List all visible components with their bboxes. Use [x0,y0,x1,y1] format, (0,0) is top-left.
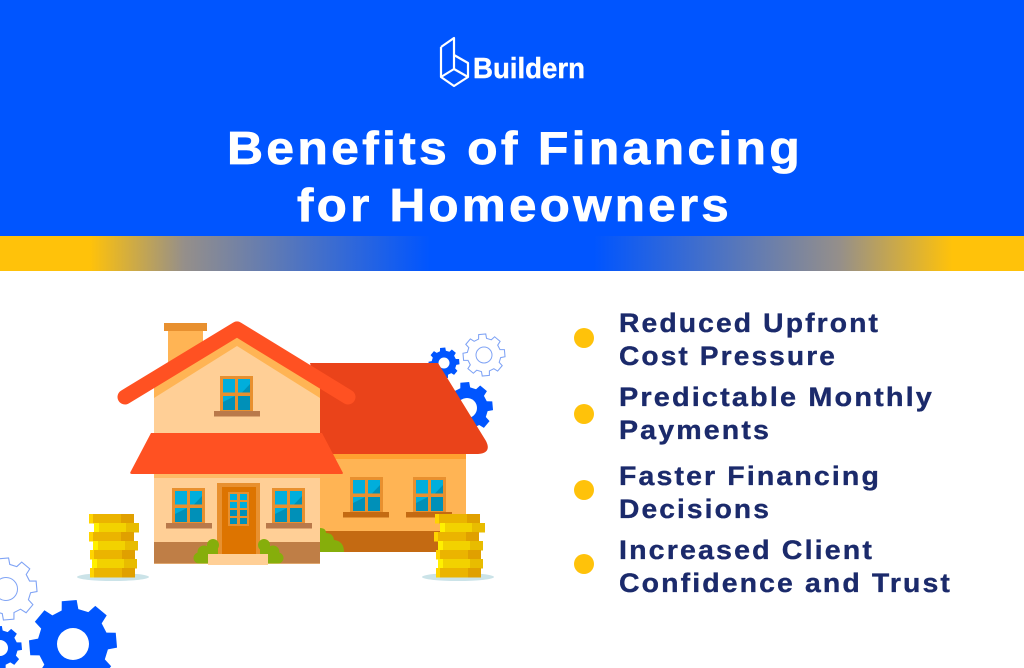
main roof [125,329,348,397]
benefit 4: Confidence and Trust [619,568,952,598]
gable wall [154,340,320,475]
porch roof [130,433,343,474]
outline gear [461,332,507,378]
header background [0,0,1024,237]
chimney [164,323,207,370]
large blue gear [26,597,120,668]
title [227,122,803,231]
small blue gear [427,346,461,380]
gears top right [427,332,507,436]
upper window [214,376,260,416]
right wing roof [310,363,488,454]
icon: building cube [441,38,468,86]
benefits list [574,308,952,598]
lower windows [166,488,312,528]
benefit 2: Predictable Monthly [619,382,934,412]
benefit 4: Increased Client [619,535,874,565]
benefit 1: Reduced Upfront [619,308,880,338]
benefit 3 [574,461,881,524]
lower wall [154,474,320,564]
gable rim [154,332,320,398]
benefit 2 [574,382,934,445]
right wing wall [320,450,466,552]
benefit 1 [574,308,880,371]
house illustration [125,323,488,565]
outline gear [0,556,39,622]
title: for Homeowners [297,179,732,231]
gears bottom left [0,556,120,668]
coin stack right [422,514,494,581]
coin stack left [77,514,149,581]
title: Benefits of Financing [227,122,803,174]
benefit 4 [574,535,952,598]
bushes [194,528,344,564]
small blue gear [0,624,24,668]
front step [208,554,268,565]
gradient band [0,236,1024,271]
door [217,483,260,555]
benefit 2: Payments [619,415,771,445]
logo: Buildern [441,38,585,86]
benefit 3: Faster Financing [619,461,881,491]
right wing windows [343,477,452,518]
logo wordmark: Buildern [473,53,585,85]
benefit 1: Cost Pressure [619,341,837,371]
benefit 3: Decisions [619,494,771,524]
large blue gear [439,380,495,436]
